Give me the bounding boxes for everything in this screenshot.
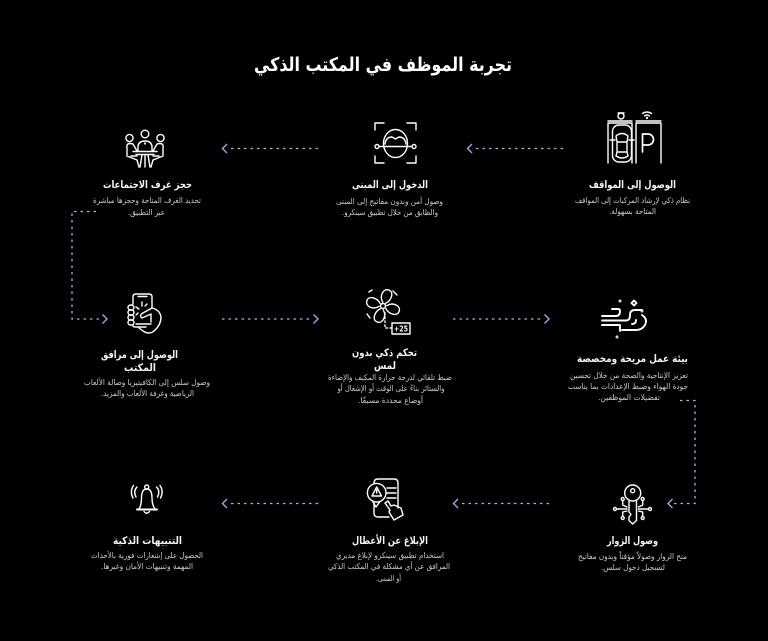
panel: parking access bbox=[575, 112, 690, 216]
icon: phone in hand bbox=[128, 294, 161, 333]
text block: لتسجيل دخول سلس. bbox=[601, 563, 665, 572]
text block: وصول سلس إلى الكافيتيريا وصالة الألعاب bbox=[84, 377, 210, 387]
text block: جودة الهواء وضبط الإعدادات بما يناسب bbox=[568, 382, 688, 391]
heading: الإبلاغ عن الأعطال bbox=[352, 534, 428, 547]
panel: touchless control bbox=[328, 288, 452, 405]
text block: عبر التطبيق. bbox=[128, 208, 165, 217]
text block bbox=[568, 371, 688, 402]
arrow: office facilities to touchless control bbox=[222, 314, 318, 324]
icon: report document bbox=[367, 479, 403, 520]
panel: meeting rooms bbox=[93, 130, 201, 217]
text block: نظام ذكي لإرشاد المركبات إلى المواقف bbox=[575, 196, 690, 205]
text block: المهمة وتنبيهات الأمان وغيرها. bbox=[101, 561, 193, 571]
heading: الوصول إلى المواقف bbox=[589, 179, 676, 191]
heading: حجز غرف الاجتماعات bbox=[103, 179, 192, 191]
heading: المكتب bbox=[124, 362, 156, 374]
panel: building entry bbox=[336, 123, 443, 217]
arrow: touchless control to workspace bbox=[453, 314, 549, 324]
icon: fan with temperature bbox=[365, 288, 410, 334]
icon: face scan bbox=[375, 123, 416, 163]
heading: الوصول إلى مرافق bbox=[101, 349, 178, 361]
text block bbox=[91, 550, 203, 571]
heading: بيئة عمل مريحة ومخصصة bbox=[577, 353, 688, 365]
icon: parking bbox=[608, 112, 661, 163]
text block: تحديد الغرف المتاحة وحجزها مباشرة bbox=[93, 196, 201, 205]
text block: تعزيز الإنتاجية والصحة من خلال تحسين bbox=[570, 371, 688, 380]
arrow: visitor access to fault reporting bbox=[454, 499, 549, 508]
text block: الرياضية وغرفة الألعاب والمزيد. bbox=[101, 388, 194, 398]
text block: المرافق عن أي مشكلة في المكتب الذكي bbox=[328, 561, 450, 571]
icon: bell bbox=[131, 485, 162, 513]
icon: digital key bbox=[614, 485, 652, 524]
heading bbox=[352, 347, 417, 372]
text block: ضبط تلقائي لدرجة حرارة المكيف والإضاءة bbox=[328, 373, 452, 382]
text block bbox=[328, 373, 452, 405]
text block: والطابق من خلال تطبيق سينكرو. bbox=[342, 208, 438, 217]
title: تجربة الموظف في المكتب الذكي bbox=[254, 54, 512, 76]
panel: comfortable workspace bbox=[568, 300, 688, 402]
text block: تفضيلات الموظفين. bbox=[598, 393, 660, 402]
text block: وصول آمن وبدون مفاتيح إلى المبنى bbox=[336, 196, 443, 206]
heading: وصول الزوار bbox=[606, 535, 658, 547]
text block: منح الزوار وصولاً مؤقتاً وبدون مفاتيح bbox=[578, 550, 687, 561]
arrow: workspace to visitor access bbox=[668, 400, 695, 508]
text block: الحصول على إشعارات فورية بالأحداث bbox=[91, 550, 203, 560]
label: temperature: +25 bbox=[394, 324, 408, 334]
heading bbox=[101, 349, 178, 374]
heading: التنبيهات الذكية bbox=[113, 535, 182, 547]
text block bbox=[336, 196, 443, 217]
text block bbox=[84, 377, 210, 398]
panel: visitor access bbox=[578, 485, 687, 572]
panel: smart alerts bbox=[91, 485, 203, 571]
text block bbox=[93, 196, 201, 217]
text block: المتاحة بسهولة. bbox=[609, 207, 656, 216]
arrow: entry to meeting rooms bbox=[222, 144, 318, 153]
text block: استخدام تطبيق سينكرو لإبلاغ مديري bbox=[336, 551, 444, 560]
text block: أوضاع محددة مسبقًا. bbox=[358, 395, 423, 405]
arrow: fault reporting to smart alerts bbox=[222, 499, 318, 508]
icon: wind and sparkle bbox=[602, 300, 646, 338]
panel: office facilities bbox=[84, 294, 210, 398]
arrow: meeting rooms to office facilities bbox=[72, 212, 107, 324]
heading: تحكم ذكي بدون bbox=[352, 347, 417, 359]
text block: أو المبنى. bbox=[376, 573, 401, 583]
text block bbox=[578, 550, 687, 572]
panel: fault reporting bbox=[328, 479, 450, 583]
heading: لمس bbox=[374, 360, 396, 372]
text block bbox=[328, 551, 450, 583]
arrow: parking to entry bbox=[468, 144, 563, 153]
text block: والستائر بناءً على الوقت أو الإشغال أو bbox=[337, 383, 445, 393]
text block bbox=[575, 196, 690, 216]
heading: الدخول إلى المبنى bbox=[352, 179, 428, 191]
icon: meeting bbox=[126, 130, 164, 167]
